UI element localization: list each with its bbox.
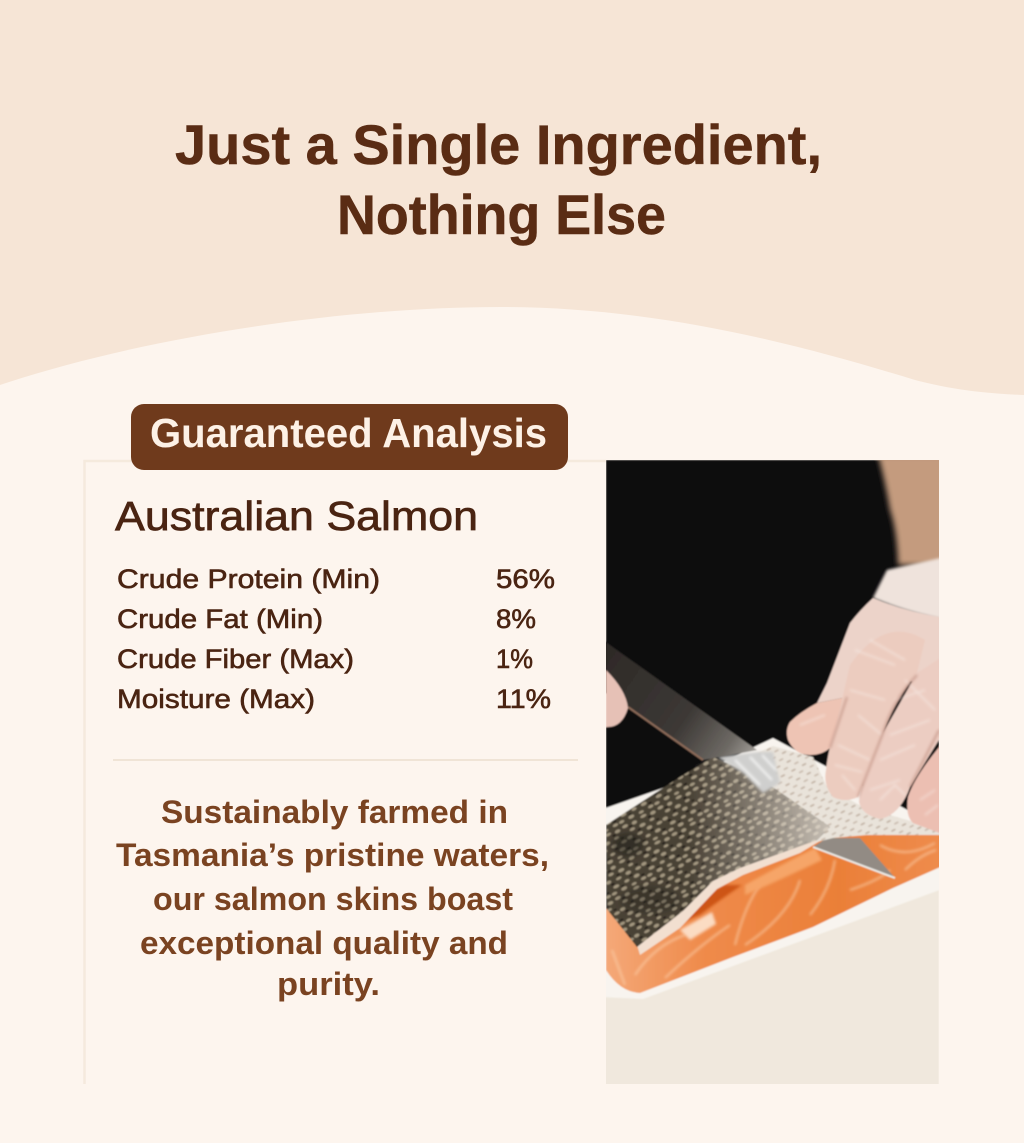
salmon skin, light scaled side: [757, 746, 945, 842]
nutrient table: [117, 564, 555, 714]
description paragraph: our salmon skins boast: [153, 881, 513, 917]
description paragraph: Tasmania’s pristine waters,: [116, 837, 549, 873]
finger three: [858, 664, 939, 819]
lower knife blade: [813, 838, 895, 878]
title: Just a Single Ingredient,: [175, 113, 822, 176]
divider: [113, 759, 578, 761]
nutrient table: Crude Fiber (Max): [117, 644, 354, 674]
panel: guaranteed analysis: [84, 404, 606, 1084]
finger two: [825, 632, 925, 800]
glove cuff: [873, 557, 945, 620]
forearm: [878, 455, 945, 566]
nutrient table: 11%: [496, 684, 551, 714]
panel border: [84, 461, 606, 1084]
bright cut edge: [680, 912, 716, 940]
skin underside rim: [637, 836, 825, 955]
silver scales highlight: [717, 752, 780, 793]
nutrient table: 56%: [496, 564, 555, 594]
nutrient table: Crude Protein (Min): [117, 564, 380, 594]
nutrient table: Moisture (Max): [117, 684, 315, 714]
finger one: [787, 697, 847, 755]
photo: hands skinning a salmon fillet: [600, 455, 945, 1090]
nutrient table: 8%: [496, 604, 536, 634]
flesh highlights: [612, 843, 936, 985]
glove wrinkles: [800, 640, 938, 815]
title: [175, 113, 822, 246]
description paragraph: exceptional quality and: [140, 925, 508, 961]
header wave band: [0, 0, 1024, 395]
product name: Australian Salmon: [115, 493, 478, 539]
knife blade: [600, 638, 757, 760]
paper towel: [600, 738, 945, 999]
title: Nothing Else: [337, 183, 666, 246]
salmon skin, dark scaled side: [606, 757, 830, 947]
table surface: [606, 890, 939, 1084]
description paragraph: Sustainably farmed in: [161, 794, 508, 830]
dark seam: [683, 885, 742, 922]
finger shadows: [830, 675, 939, 797]
glove back: [817, 598, 945, 703]
nutrient table: 1%: [496, 644, 533, 674]
badge: guaranteed analysis: Guaranteed Analysis: [150, 410, 547, 456]
knife spine: [628, 707, 703, 760]
finger four: [906, 745, 939, 834]
dark blotches: [612, 833, 644, 857]
nutrient table: Crude Fat (Min): [117, 604, 323, 634]
gloved hand: [787, 598, 945, 835]
dark apron background: [606, 460, 939, 810]
salmon flesh: [606, 833, 945, 993]
badge: guaranteed analysis: [131, 404, 568, 470]
description paragraph: [116, 794, 549, 1002]
left gloved fingers: [606, 670, 628, 727]
description paragraph: purity.: [277, 966, 380, 1002]
